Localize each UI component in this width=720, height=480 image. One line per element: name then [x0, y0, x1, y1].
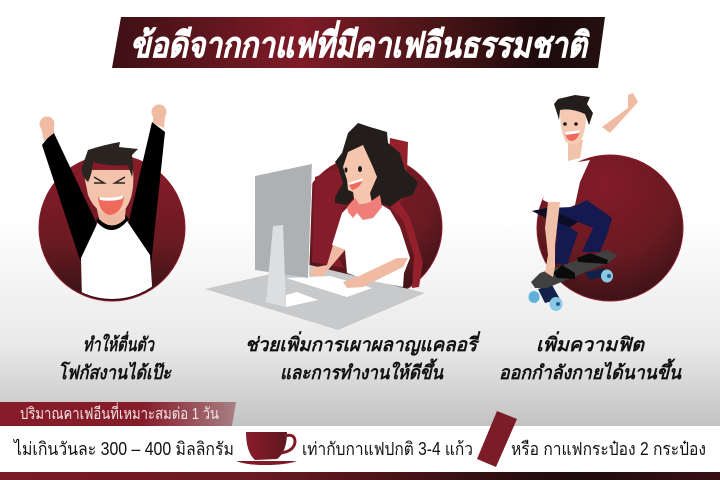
front wheels — [528, 285, 562, 311]
left arm — [310, 245, 345, 277]
desk — [205, 265, 425, 330]
caption: burn calories: และการทำงานให้ดีขึ้น — [280, 358, 444, 384]
footer bar — [0, 472, 720, 480]
neck and face — [568, 140, 583, 161]
illustration: woman at computer — [205, 123, 442, 330]
illustration: skateboarder — [528, 93, 683, 311]
monitor stand — [266, 225, 286, 307]
title: ข้อดีจากกาแฟที่มีคาเฟอีนธรรมชาติ — [130, 20, 590, 65]
right arm — [343, 258, 408, 288]
face — [343, 145, 377, 205]
rear wheels — [585, 268, 613, 282]
caption: burn calories: ช่วยเพิ่มการเผาผลาญแคลอรี่ — [245, 331, 481, 356]
white info strip — [0, 426, 720, 472]
raised arm — [602, 93, 638, 133]
shirt — [332, 204, 410, 287]
shoes — [577, 253, 608, 264]
caption: burn calories — [245, 331, 481, 384]
caption: stay alert: ทำให้ตื่นตัว — [83, 331, 155, 356]
title banner — [112, 17, 605, 68]
ribbon: daily caffeine amount: ปริมาณคาเฟอีนที่เหมาะสมต่อ 1 วัน — [20, 402, 219, 423]
caption: stay alert — [58, 331, 173, 384]
ribbon: daily caffeine amount — [0, 402, 236, 426]
woman hair back — [335, 123, 418, 207]
keyboard — [286, 276, 372, 297]
skateboard — [531, 250, 617, 288]
caption: fitness: เพิ่มความฟิต — [536, 331, 646, 356]
shirt — [543, 160, 590, 210]
red circle and chair — [298, 138, 442, 299]
trousers — [532, 200, 612, 265]
hand arm — [545, 202, 560, 277]
text: milligram limit: ไม่เกินวันละ 300 – 400 มิลลิกรัม — [12, 438, 234, 459]
caption: fitness — [499, 331, 682, 384]
caption: fitness: ออกกำลังกายได้นานขึ้น — [499, 358, 682, 384]
headphones — [347, 195, 382, 220]
icon: coffee can — [477, 411, 517, 467]
text: regular coffee equivalent: เท่ากับกาแฟปกติ 3-4 แก้ว — [302, 439, 473, 459]
icon: coffee cup — [236, 432, 297, 465]
monitor — [255, 164, 312, 278]
illustration: cheering man — [39, 104, 185, 301]
caption: stay alert: โฟกัสงานได้เป๊ะ — [58, 361, 173, 384]
